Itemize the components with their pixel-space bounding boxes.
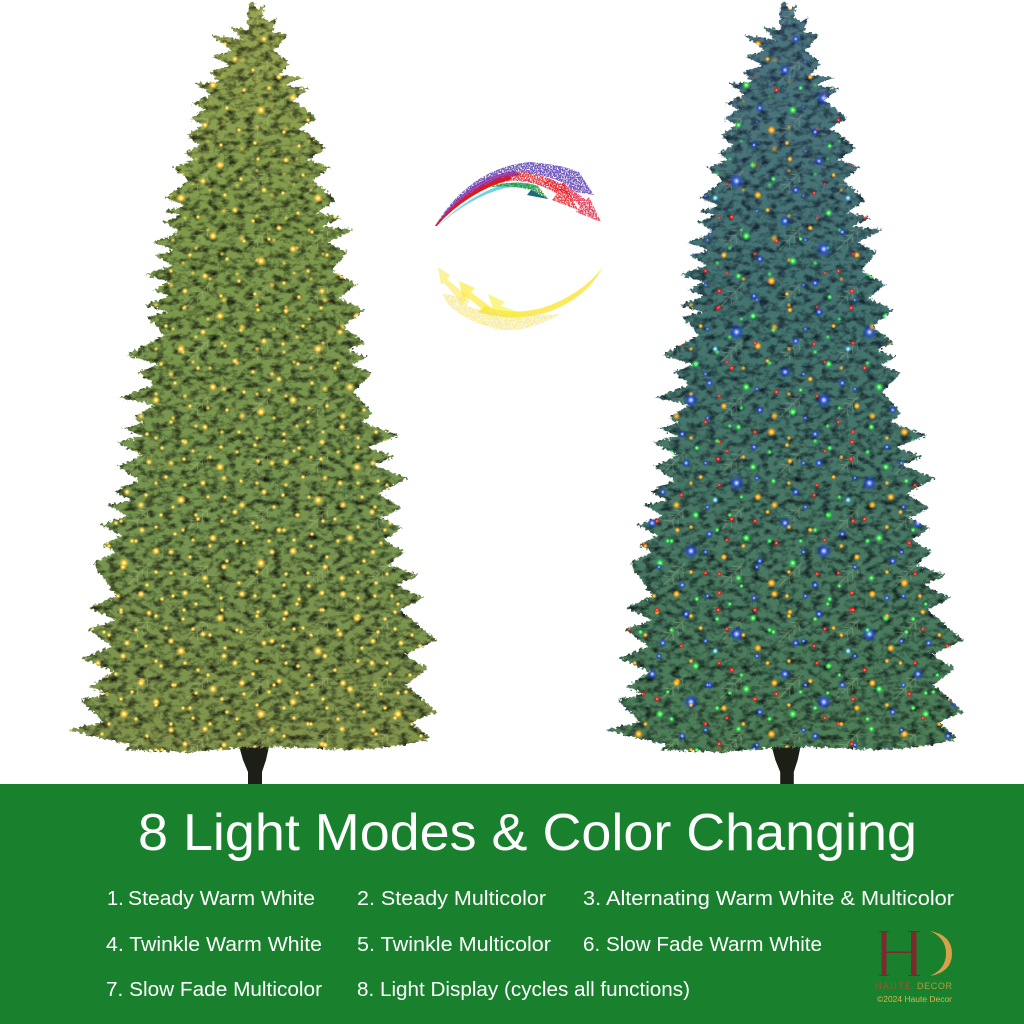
- tree trunk: right: [771, 742, 802, 784]
- tree: warm white lights: [60, 0, 450, 784]
- logo: Haute Decor: HAUTE: [875, 981, 911, 991]
- logo: Haute Decor: [875, 931, 952, 1004]
- light mode 2: 2. Steady Multicolor: [357, 888, 546, 910]
- light mode 7: 7. Slow Fade Multicolor: [106, 979, 322, 1001]
- tree: multicolor lights: [598, 0, 976, 784]
- blue cast: right tree: [606, 0, 964, 752]
- foliage: left tree: [68, 0, 437, 752]
- logo: Haute Decor: ©2024 Haute Decor: [877, 995, 952, 1004]
- needle detail: left tree: [68, 0, 437, 752]
- foliage: right tree: [606, 0, 964, 752]
- light mode 8: 8. Light Display (cycles all functions): [357, 979, 690, 1001]
- light mode 5: 5. Twinkle Multicolor: [357, 934, 551, 956]
- panel: green footer: [0, 784, 1024, 1024]
- warm white lights: left tree: [60, 0, 450, 756]
- logo: Haute Decor: DECOR: [917, 981, 952, 991]
- rainbow arc arrow: [435, 162, 601, 226]
- light mode 1: Steady Warm White: [128, 888, 315, 910]
- heading: 8 Light Modes & Color Changing: [138, 804, 917, 862]
- light mode 3: 3. Alternating Warm White & Multicolor: [583, 888, 954, 910]
- light mode 6: 6. Slow Fade Warm White: [583, 934, 822, 956]
- multicolor lights: right tree: [598, 0, 976, 756]
- tree trunk: left: [238, 742, 270, 784]
- light mode 4: 4. Twinkle Warm White: [106, 934, 322, 956]
- light mode 1: 1.: [107, 888, 124, 910]
- rainbow bands: [435, 171, 578, 226]
- icon: color changing swoosh: [435, 162, 603, 330]
- yellow arc arrow: [438, 267, 603, 330]
- needle detail: right tree: [606, 0, 964, 752]
